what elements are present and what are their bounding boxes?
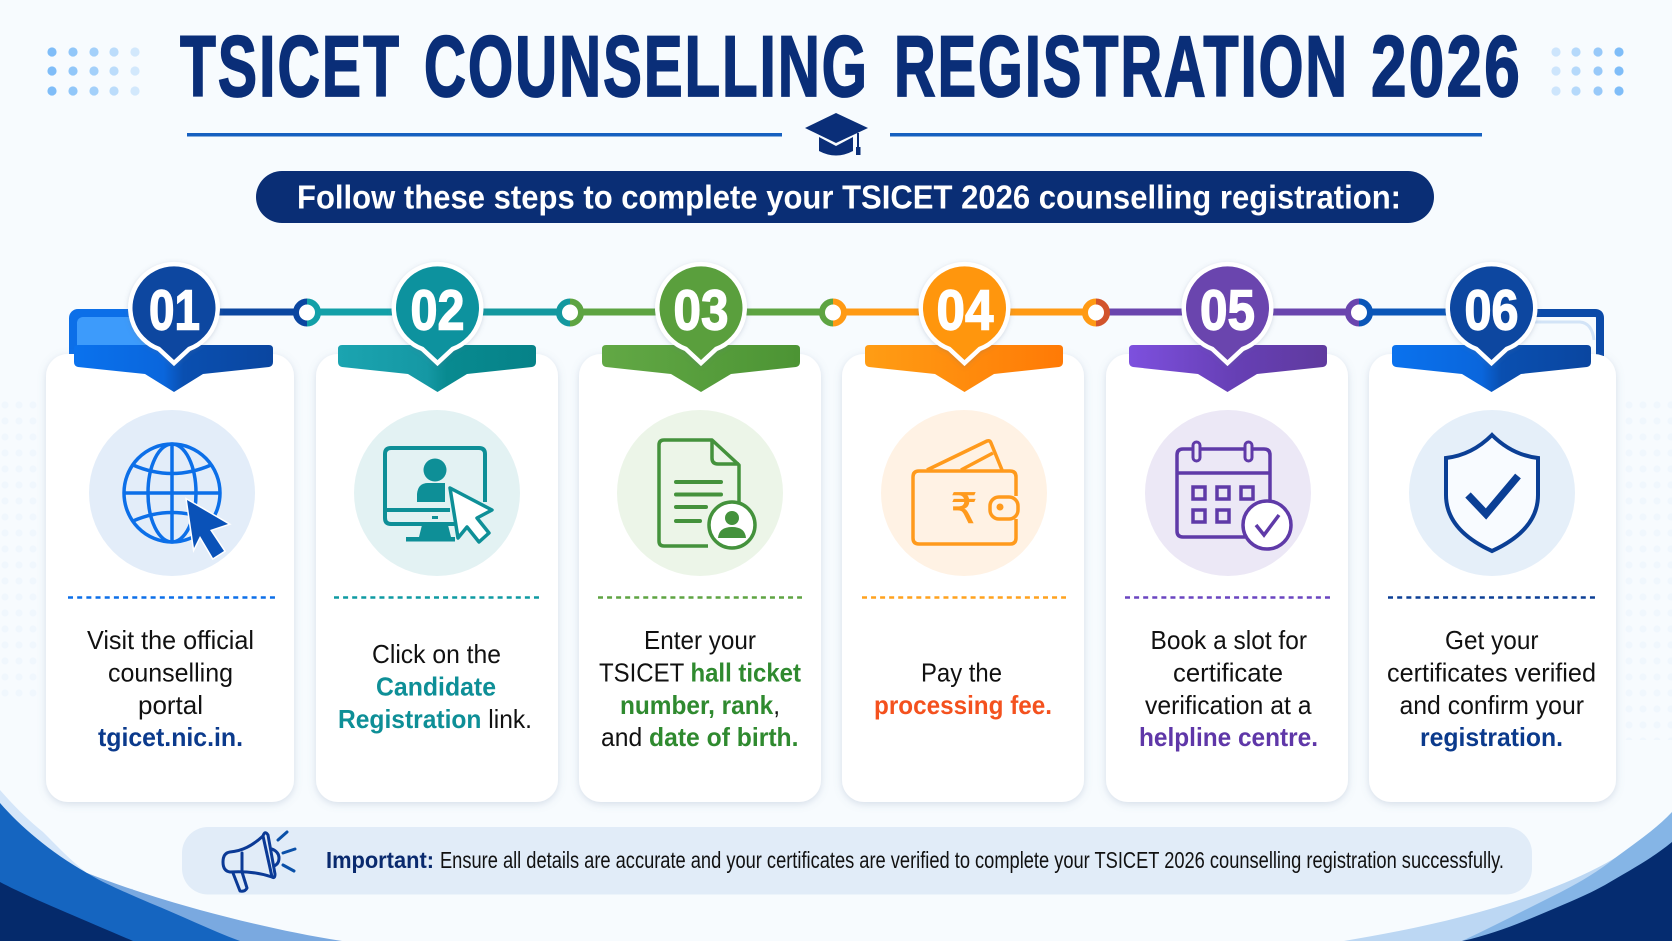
badge: 01: 01 (149, 278, 200, 342)
ribbon: step 2 (338, 345, 536, 392)
panel: step 3 (579, 266, 821, 802)
step text 1: Visit the official (87, 625, 254, 655)
title: TSICET (180, 19, 401, 115)
ribbon: step 6 (1392, 345, 1591, 392)
step text 1: portal (138, 690, 203, 720)
badge: 05: 05 (1200, 278, 1255, 342)
panel: step 2 (316, 266, 558, 802)
callout: important note (182, 827, 1532, 894)
subtitle pill: Follow these steps to complete your TSICET 2026 counselling registration: (297, 180, 1401, 216)
step text 1 (87, 625, 254, 752)
subtitle pill (256, 171, 1434, 223)
badge: 06 (1450, 266, 1533, 360)
panel: step 1 (46, 266, 294, 802)
step text 6: Get your (1445, 625, 1539, 655)
step text 6: and confirm your (1400, 690, 1584, 720)
icon: shield with check (1409, 410, 1575, 576)
step text 6: certificates verified (1387, 658, 1596, 688)
step text 2: Registration link. (338, 704, 532, 734)
ribbon: step 5 (1129, 345, 1327, 392)
badge: 03 (660, 266, 743, 360)
step text 5: Book a slot for (1150, 625, 1307, 655)
step text 3 (599, 625, 801, 752)
step text 2: Candidate (376, 672, 496, 702)
panel: step 5 (1106, 266, 1348, 802)
title: COUNSELLING (424, 19, 869, 115)
title: REGISTRATION (894, 19, 1349, 115)
step text 4: Pay the (921, 658, 1002, 688)
ribbon: step 1 (74, 345, 273, 392)
divider (1388, 596, 1595, 599)
icon: globe with cursor (89, 410, 255, 576)
step text 4 (874, 658, 1052, 720)
step text 5: certificate (1173, 658, 1283, 688)
step text 5: helpline centre. (1139, 722, 1318, 752)
icon: document with user (617, 410, 783, 576)
step text 5: verification at a (1145, 690, 1312, 720)
step text 3: TSICET hall ticket (599, 658, 801, 688)
step text 5 (1139, 625, 1318, 752)
badge: 06: 06 (1464, 278, 1518, 342)
ribbon: step 3 (602, 345, 800, 392)
icon: calendar with check (1145, 410, 1311, 576)
decorative wave: bottom right corner (1344, 812, 1672, 941)
title divider lines (187, 133, 1482, 136)
step text 2 (338, 639, 532, 734)
panel: step 6 (1369, 266, 1616, 802)
step text 3: number, rank, (620, 690, 780, 720)
divider (862, 596, 1066, 599)
panel: step 4 (842, 266, 1084, 802)
decorative dots: left (47, 47, 140, 96)
divider (1125, 596, 1330, 599)
timeline connector (69, 300, 1600, 369)
icon: graduation cap (805, 113, 868, 156)
divider (334, 596, 539, 599)
badge: 02 (396, 266, 479, 360)
badge: 04: 04 (936, 278, 994, 342)
badge: 05 (1186, 266, 1269, 360)
step text 4: processing fee. (874, 690, 1052, 720)
badge: 04 (923, 266, 1006, 360)
step text 6 (1387, 625, 1596, 752)
timeline nodes (294, 300, 1372, 326)
icon: monitor with user (354, 410, 520, 576)
badge: 01 (132, 266, 216, 360)
decorative wave: bottom left corner (0, 790, 342, 941)
badge: 03: 03 (674, 278, 728, 342)
title: 2026 (1371, 19, 1522, 115)
divider (68, 596, 275, 599)
badge: 02: 02 (410, 278, 464, 342)
ribbon: step 4 (865, 345, 1063, 392)
step text 1: counselling (108, 658, 233, 688)
step text 2: Click on the (372, 639, 501, 669)
step text 6: registration. (1420, 722, 1563, 752)
step text 3: and date of birth. (601, 722, 798, 752)
title (180, 19, 1522, 115)
step text 3: Enter your (644, 625, 756, 655)
divider (598, 596, 802, 599)
note text: Important: (326, 847, 434, 873)
decorative dots: right (1551, 47, 1624, 96)
icon: wallet with rupee: ₹ (951, 484, 977, 533)
icon: wallet with rupee (881, 410, 1047, 576)
step text 1: tgicet.nic.in. (98, 722, 243, 752)
icon: megaphone (223, 832, 295, 891)
